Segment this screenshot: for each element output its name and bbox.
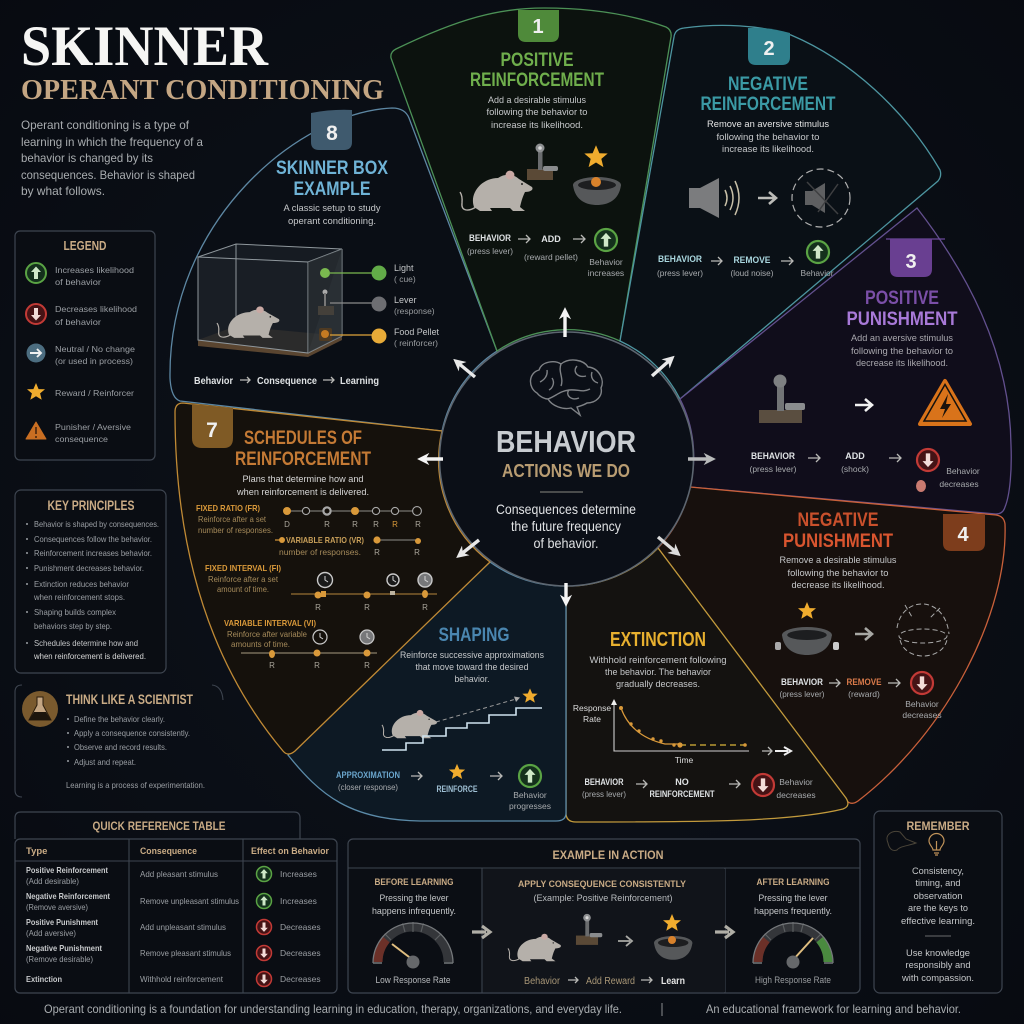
- flow: (loud noise): [730, 268, 774, 278]
- description: [400, 650, 544, 685]
- section: after learning: [753, 877, 833, 985]
- legend item: neutral: [26, 344, 135, 366]
- heading: REINFORCEMENT: [470, 70, 604, 91]
- illustration: rat climbing stairs: [382, 688, 542, 750]
- schedule: fixed ratio: R: [373, 520, 379, 529]
- description: [707, 119, 829, 155]
- schedule: fixed ratio: Reinforce after a set: [198, 515, 267, 524]
- flow: APPROXIMATION: [336, 770, 400, 780]
- row: negative reinforcement: [26, 891, 317, 912]
- flow: (reward pellet): [524, 252, 578, 262]
- schedule: variable ratio: number of responses.: [279, 548, 361, 557]
- flow: (press lever): [750, 464, 797, 474]
- description: that move toward the desired: [416, 662, 528, 673]
- flow: BEHAVIOR: [584, 777, 624, 787]
- flow: [657, 241, 834, 278]
- schedule: variable interval: Reinforce after variable: [227, 630, 308, 639]
- flow: (press lever): [467, 246, 513, 256]
- section: after learning: High Response Rate: [755, 975, 831, 985]
- schedule: fixed interval: R: [364, 603, 370, 612]
- flow: BEHAVIOR: [469, 233, 511, 243]
- scientist list: Observe and record results.: [74, 742, 167, 752]
- table title: QUICK REFERENCE TABLE: [92, 819, 226, 833]
- heading: SCHEDULES OF: [244, 428, 362, 449]
- panel: remember: [874, 811, 1002, 993]
- legend item: increases: Increases likelihood: [55, 265, 134, 275]
- footer: [44, 1002, 961, 1016]
- section: apply consequence: Learn: [661, 976, 685, 987]
- section: after learning: Pressing the lever: [758, 893, 828, 904]
- description: [284, 203, 381, 227]
- illustration: rat and lever: [460, 144, 558, 211]
- description: Reinforce successive approximations: [400, 650, 544, 661]
- heading: NEGATIVE: [728, 74, 808, 95]
- section: before learning: happens infrequently.: [372, 906, 456, 917]
- schedule: variable ratio: [275, 535, 421, 557]
- badge 1: 1: [532, 16, 544, 38]
- description: following the behavior to: [851, 346, 953, 357]
- box key labels: Food Pellet: [394, 327, 439, 337]
- intro text: consequences. Behavior is shaped: [21, 168, 195, 182]
- icon: star and bowl: [775, 602, 839, 655]
- flow: progresses: [509, 801, 551, 811]
- principles list: behaviors step by step.: [34, 621, 112, 631]
- row: extinction: Decreases: [280, 974, 321, 984]
- description: Remove a desirable stimulus: [780, 555, 897, 566]
- table header: [26, 846, 329, 857]
- flow: [750, 449, 980, 492]
- legend title: LEGEND: [64, 239, 106, 253]
- principles list: Punishment decreases behavior.: [34, 563, 144, 573]
- section: after learning: AFTER LEARNING: [756, 877, 830, 888]
- principles list: Extinction reduces behavior: [34, 579, 129, 589]
- badge 2: 2: [763, 38, 775, 60]
- hub text: Consequences determine: [496, 501, 636, 517]
- flow: NO: [675, 777, 689, 787]
- scientist title: THINK LIKE A SCIENTIST: [66, 692, 194, 707]
- section: apply consequence: Behavior: [524, 976, 561, 987]
- description: gradually decreases.: [616, 679, 700, 690]
- intro text: learning in which the frequency of a: [21, 135, 203, 149]
- intro text: behavior is changed by its: [21, 151, 153, 165]
- heading: EXTINCTION: [610, 629, 706, 651]
- box key labels: ( cue): [394, 274, 416, 284]
- chart: response rate decay: [573, 699, 791, 765]
- schedule: fixed ratio: R: [392, 520, 398, 529]
- row: positive reinforcement: Positive Reinforcement: [26, 865, 108, 875]
- row: negative punishment: Remove pleasant stimulus: [140, 948, 231, 958]
- schedule: variable interval: R: [314, 661, 320, 670]
- section: before learning: [372, 877, 456, 985]
- badge 7: 7: [206, 419, 218, 442]
- schedule: fixed ratio: number of responses.: [198, 526, 273, 535]
- remember text: [901, 866, 975, 984]
- remember text: effective learning.: [901, 916, 975, 927]
- legend item: decreases: of behavior: [55, 317, 101, 327]
- schedule: fixed interval: [205, 563, 437, 612]
- illustration: skinner box: [198, 244, 386, 357]
- table header: Type: [26, 846, 47, 857]
- table header: Effect on Behavior: [251, 846, 329, 857]
- panel: schedules of reinforcement: [175, 403, 490, 754]
- icon: muted speaker: [792, 169, 850, 227]
- row: negative reinforcement: Negative Reinforcement: [26, 891, 110, 901]
- badge 8: [311, 110, 352, 150]
- flow: REMOVE: [846, 677, 882, 687]
- legend item: increases: [26, 263, 134, 287]
- section: before learning: Pressing the lever: [380, 893, 448, 904]
- heading: REINFORCEMENT: [235, 449, 371, 470]
- arrow: [758, 192, 776, 204]
- flow: [467, 229, 624, 278]
- principles list: Behavior is shaped by consequences.: [34, 519, 159, 529]
- arrow: [855, 399, 872, 411]
- description: A classic setup to study: [284, 203, 381, 214]
- badge 3: [886, 239, 945, 277]
- flow: BEHAVIOR: [658, 254, 702, 264]
- panel: positive reinforcement: [391, 8, 671, 351]
- scientist list: Apply a consequence consistently.: [74, 728, 190, 738]
- section: apply consequence: (Example: Positive Reinforcement): [534, 893, 672, 904]
- flow: ADD: [541, 234, 561, 244]
- scientist list: [66, 714, 205, 790]
- legend item: punisher: consequence: [55, 434, 108, 444]
- principles list: Schedules determine how and: [34, 638, 138, 648]
- row: negative reinforcement: (Remove aversive): [26, 902, 88, 912]
- badge 3: 3: [905, 251, 917, 273]
- flow: (press lever): [582, 789, 626, 799]
- heading: POSITIVE: [500, 50, 574, 71]
- row: negative punishment: Negative Punishment: [26, 943, 102, 953]
- schedule: variable interval: amounts of time.: [231, 640, 290, 649]
- panel: shaping: [288, 562, 566, 821]
- schedule: variable ratio: R: [374, 548, 380, 557]
- flow: increases: [588, 268, 624, 278]
- principles list: [26, 519, 159, 661]
- panel: positive punishment: [680, 208, 1011, 514]
- description: [851, 333, 953, 369]
- description: following the behavior to: [788, 568, 888, 579]
- icon: star and bowl: [573, 145, 621, 205]
- remember text: Use knowledge: [906, 948, 970, 959]
- flow: decreases: [902, 710, 942, 720]
- scientist list: Define the behavior clearly.: [74, 714, 165, 724]
- schedule: variable ratio: VARIABLE RATIO (VR): [286, 535, 364, 545]
- schedule: fixed interval: amount of time.: [217, 585, 269, 594]
- panel: legend: [15, 231, 155, 460]
- section: apply consequence: Add Reward: [586, 976, 635, 987]
- flow: (press lever): [780, 689, 825, 699]
- legend item: decreases: [26, 304, 137, 327]
- flow: REMOVE: [734, 255, 770, 265]
- gauge: high response rate: [753, 922, 833, 968]
- schedule: fixed interval: Reinforce after a set: [208, 575, 279, 584]
- panel: key principles: [15, 490, 166, 673]
- heading: POSITIVE: [865, 288, 939, 309]
- flow: behavior consequence learning: [194, 376, 379, 387]
- flow: [582, 774, 816, 800]
- subtitle: operant conditioning: OPERANT CONDITIONING: [21, 75, 384, 106]
- icon: faint brain: [887, 831, 916, 851]
- chart: response rate decay: Response: [573, 703, 611, 713]
- badge 4: 4: [957, 524, 969, 546]
- schedule: variable interval: R: [269, 661, 275, 670]
- schedule: variable interval: [224, 618, 377, 670]
- flow: (shock): [841, 464, 869, 474]
- description: increase its likelihood.: [722, 144, 814, 155]
- remember title: REMEMBER: [906, 819, 970, 833]
- description: [486, 95, 588, 131]
- schedule: variable interval: R: [364, 661, 370, 670]
- heading: SKINNER BOX: [276, 158, 388, 179]
- row: positive punishment: (Add aversive): [26, 928, 76, 938]
- remember text: timing, and: [916, 878, 960, 889]
- flow: behavior consequence learning: Behavior: [194, 376, 233, 387]
- flow: [780, 672, 942, 720]
- remember text: responsibly and: [906, 960, 970, 971]
- heading: PUNISHMENT: [846, 309, 958, 330]
- heading: [846, 288, 958, 330]
- arrow: [855, 628, 872, 640]
- footer: Operant conditioning is a foundation for understanding learning in education, therapy, organizations, and everyday life.: [44, 1002, 622, 1016]
- description: Withhold reinforcement following: [590, 655, 726, 666]
- schedule: fixed ratio: FIXED RATIO (FR): [196, 503, 260, 513]
- panel: negative punishment: [658, 487, 1005, 803]
- row: negative punishment: Decreases: [280, 948, 321, 958]
- row: extinction: Extinction: [26, 974, 62, 984]
- arrows from center: [422, 312, 711, 602]
- legend item: punisher: Punisher / Aversive: [55, 422, 131, 432]
- icon: light bulb: [929, 834, 944, 855]
- schedule: fixed interval: R: [422, 603, 428, 612]
- description: following the behavior to: [486, 107, 588, 118]
- remember text: Consistency,: [912, 866, 964, 877]
- description: decrease its likelihood.: [792, 580, 884, 591]
- description: decrease its likelihood.: [856, 358, 948, 369]
- box key labels: ( reinforcer): [394, 338, 438, 348]
- panel: extinction: [566, 548, 848, 822]
- row: negative punishment: (Remove desirable): [26, 954, 93, 964]
- panel: example in action: [348, 839, 860, 993]
- schedule: fixed ratio: D: [284, 520, 290, 529]
- schedule: fixed ratio: R: [352, 520, 358, 529]
- heading: NEGATIVE: [798, 510, 878, 531]
- description: [590, 655, 726, 690]
- panel: quick reference table: [15, 812, 337, 993]
- heading: [235, 428, 371, 470]
- schedule: fixed ratio: R: [324, 520, 330, 529]
- title: skinner: SKINNER: [21, 15, 269, 78]
- description: Remove an aversive stimulus: [707, 119, 829, 130]
- flow: Behavior: [905, 699, 939, 709]
- box key labels: Light: [394, 263, 414, 273]
- description: operant conditioning.: [288, 216, 376, 227]
- scientist list: Learning is a process of experimentation.: [66, 780, 205, 790]
- legend item: punisher: [26, 422, 131, 444]
- flow: BEHAVIOR: [781, 677, 823, 687]
- section: before learning: BEFORE LEARNING: [374, 877, 454, 888]
- icon: lever: [759, 374, 805, 423]
- row: positive punishment: Positive Punishment: [26, 917, 98, 927]
- legend item: increases: of behavior: [55, 277, 101, 287]
- row: positive reinforcement: (Add desirable): [26, 876, 79, 886]
- intro text: Operant conditioning is a type of: [21, 118, 190, 132]
- description: [780, 555, 897, 591]
- subtitle: ACTIONS WE DO: [502, 461, 630, 481]
- description: Plans that determine how and: [242, 474, 364, 485]
- flow: ADD: [845, 451, 865, 461]
- description: Add an aversive stimulus: [851, 333, 953, 344]
- intro text: [21, 118, 203, 198]
- description: increase its likelihood.: [491, 120, 583, 131]
- heading: PUNISHMENT: [783, 531, 893, 552]
- flow: Behavior: [779, 777, 813, 787]
- schedule: variable interval: VARIABLE INTERVAL (VI): [224, 618, 316, 628]
- flow: Behavior: [946, 466, 980, 476]
- schedule: fixed interval: FIXED INTERVAL (FI): [205, 563, 281, 573]
- legend item: reward: [27, 383, 134, 400]
- icon: removed reward: [897, 604, 949, 656]
- principles list: when reinforcement stops.: [33, 592, 125, 602]
- icon: electric warning: [920, 381, 970, 424]
- row: negative reinforcement: Increases: [280, 896, 317, 906]
- badge 8: 8: [326, 122, 338, 145]
- intro text: by what follows.: [21, 184, 105, 198]
- description: [236, 474, 369, 498]
- legend item: decreases: Decreases likelihood: [55, 304, 137, 314]
- row: positive punishment: [26, 917, 321, 938]
- row: positive reinforcement: Increases: [280, 869, 317, 879]
- principles list: Reinforcement increases behavior.: [34, 548, 152, 558]
- badge 1: [518, 10, 559, 42]
- row: positive punishment: Add unpleasant stimulus: [140, 922, 226, 932]
- row: extinction: Withhold reinforcement: [140, 974, 224, 984]
- flow: (press lever): [657, 268, 703, 278]
- row: negative punishment: [26, 943, 321, 964]
- hub text: [496, 501, 636, 551]
- chart: response rate decay: Time: [675, 755, 694, 765]
- heading: [276, 158, 388, 200]
- description: following the behavior to: [716, 132, 820, 143]
- flow: Behavior: [589, 257, 623, 267]
- remember text: are the keys to: [908, 903, 968, 914]
- badge 4: [943, 514, 985, 551]
- title: BEHAVIOR: [496, 424, 636, 459]
- principles list: Consequences follow the behavior.: [34, 534, 152, 544]
- heading: [470, 50, 604, 91]
- row: positive reinforcement: [26, 865, 317, 886]
- schedule: fixed ratio: [196, 503, 421, 535]
- box key labels: (response): [394, 306, 435, 316]
- schedule: fixed interval: R: [315, 603, 321, 612]
- remember text: with compassion.: [901, 973, 974, 984]
- row: positive reinforcement: Add pleasant stimulus: [140, 869, 218, 879]
- heading: EXAMPLE: [294, 179, 370, 200]
- panel: think like a scientist: [15, 685, 223, 797]
- row: positive punishment: Decreases: [280, 922, 321, 932]
- icon: flask: [22, 691, 58, 727]
- section: apply consequence: APPLY CONSEQUENCE CONSISTENTLY: [518, 879, 687, 890]
- legend item: neutral: Neutral / No change: [55, 344, 135, 354]
- section: apply consequence: [508, 879, 692, 987]
- legend item: reward: Reward / Reinforcer: [55, 388, 134, 398]
- schedule: fixed ratio: R: [415, 520, 421, 529]
- flow: behavior consequence learning: Consequence: [257, 376, 317, 387]
- table header: Consequence: [140, 846, 197, 857]
- gauge: low response rate: [373, 922, 453, 968]
- principles list: when reinforcement is delivered.: [33, 651, 146, 661]
- illustration: rat lever reward: [508, 914, 692, 961]
- heading: [700, 74, 836, 115]
- box key labels: Lever: [394, 295, 417, 305]
- flow: BEHAVIOR: [751, 451, 795, 461]
- flow: Behavior: [513, 790, 547, 800]
- heading: REINFORCEMENT: [700, 94, 836, 115]
- flow: behavior consequence learning: Learning: [340, 376, 379, 387]
- description: when reinforcement is delivered.: [236, 487, 369, 498]
- section: after learning: happens frequently.: [754, 906, 832, 917]
- badge 2: [748, 28, 790, 65]
- description: Add a desirable stimulus: [488, 95, 586, 106]
- legend item: neutral: (or used in process): [55, 356, 133, 366]
- badge 7: [192, 404, 233, 448]
- description: the behavior. The behavior: [605, 667, 711, 678]
- icon: brain: [530, 360, 602, 415]
- flow: decreases: [939, 479, 979, 489]
- panel: skinner box example: [170, 108, 497, 431]
- flow: Behavior: [800, 268, 834, 278]
- scientist list: Adjust and repeat.: [74, 757, 136, 767]
- flow: (reward): [848, 689, 880, 699]
- principles list: Shaping builds complex: [34, 607, 117, 617]
- heading: [783, 510, 893, 552]
- example title: EXAMPLE IN ACTION: [552, 848, 664, 862]
- flow: REINFORCEMENT: [650, 789, 715, 799]
- key principles title: KEY PRINCIPLES: [48, 498, 134, 513]
- section: before learning: Low Response Rate: [376, 975, 450, 985]
- hub text: the future frequency: [511, 518, 621, 534]
- icon: loud speaker: [689, 178, 739, 218]
- description: behavior.: [454, 674, 490, 685]
- flow: decreases: [776, 790, 816, 800]
- center hub: behavior: [440, 332, 694, 586]
- row: extinction: [26, 972, 321, 986]
- arrow: [472, 926, 490, 938]
- flow: [336, 764, 551, 811]
- schedule: variable ratio: R: [414, 548, 420, 557]
- hub text: of behavior.: [534, 535, 598, 551]
- footer: An educational framework for learning and behavior.: [706, 1002, 961, 1016]
- heading: SHAPING: [438, 625, 510, 646]
- row: negative reinforcement: Remove unpleasant stimulus: [140, 896, 239, 906]
- flow: REINFORCE: [436, 784, 478, 794]
- remember text: observation: [914, 891, 962, 902]
- flow: (closer response): [338, 782, 398, 792]
- arrow: [715, 926, 733, 938]
- chart: response rate decay: Rate: [583, 714, 601, 724]
- box key labels: [394, 263, 439, 348]
- panel: negative reinforcement: [620, 25, 941, 399]
